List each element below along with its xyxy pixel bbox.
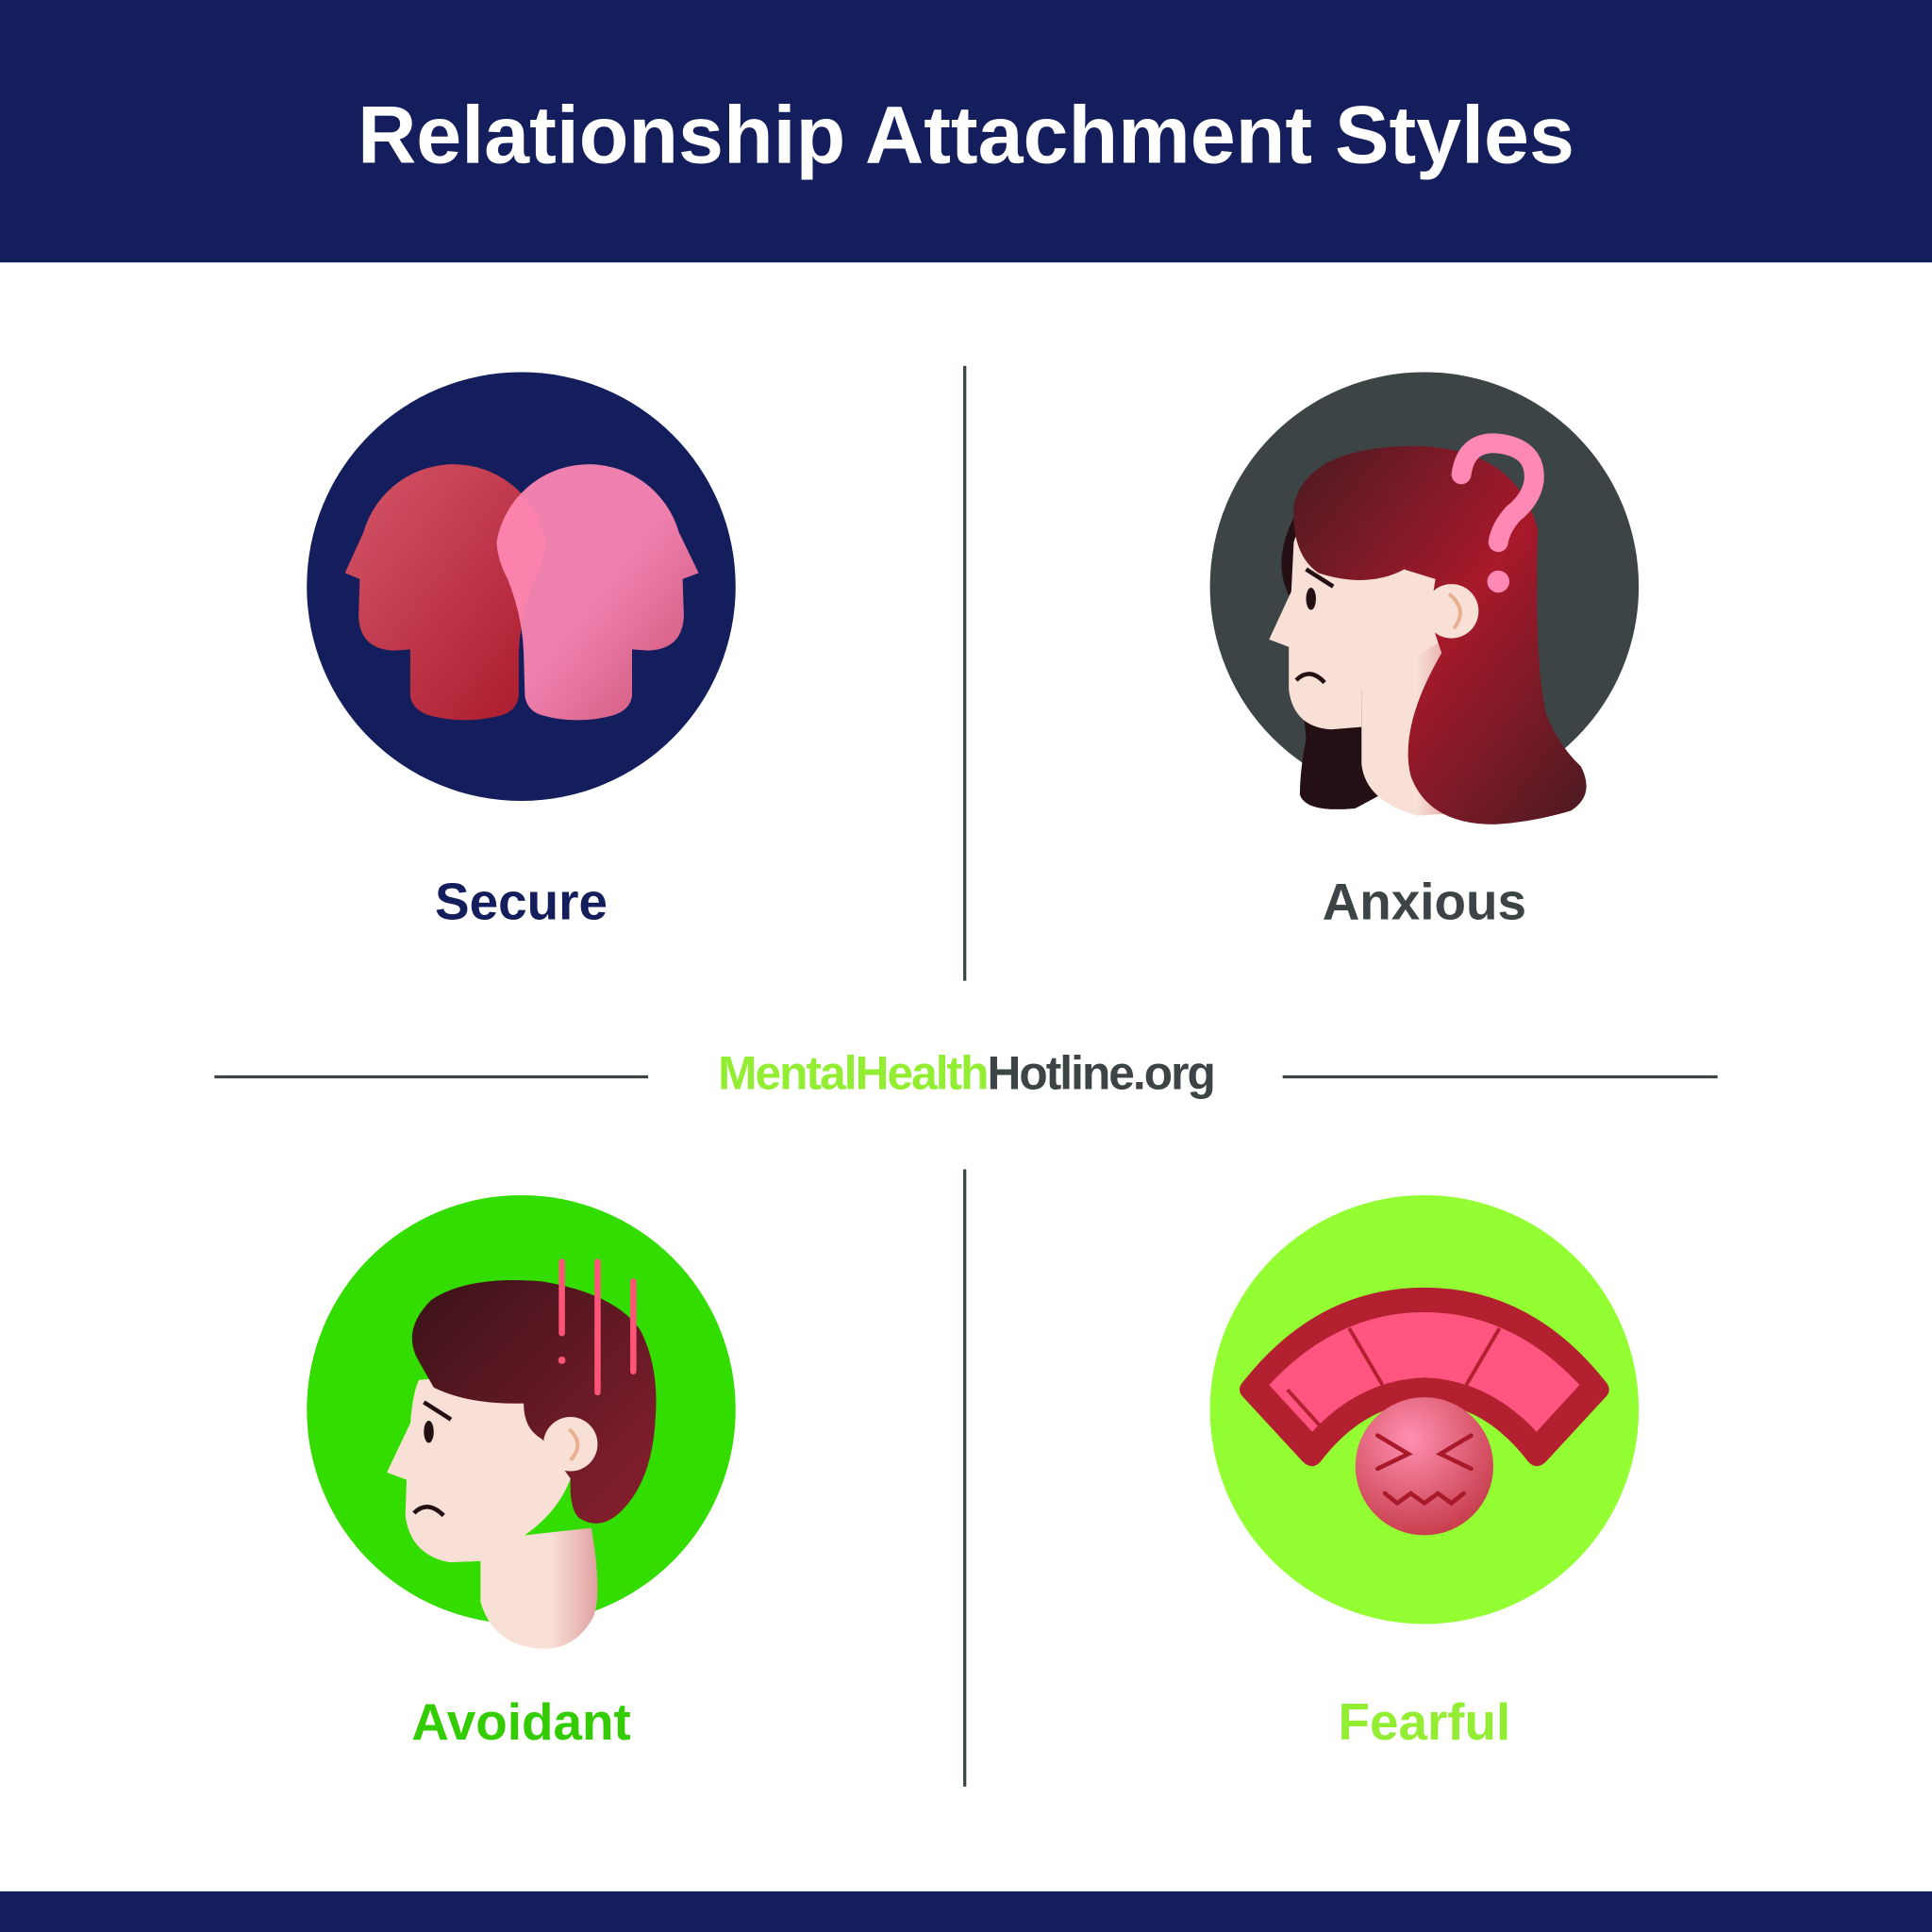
title: Relationship Attachment Styles xyxy=(358,90,1574,180)
panel: anxious xyxy=(1210,372,1639,930)
icon: scared face xyxy=(1356,1397,1493,1535)
panel: secure xyxy=(307,372,736,930)
icon: stress lines xyxy=(562,1261,633,1392)
header bar xyxy=(0,0,1932,262)
label: Avoidant xyxy=(411,1692,631,1751)
panel: avoidant xyxy=(307,1195,736,1751)
label: Anxious xyxy=(1323,872,1526,930)
icon: anxious woman xyxy=(1269,443,1587,824)
footer bar xyxy=(0,1891,1932,1932)
icon: two heads xyxy=(345,464,699,720)
icon: question mark xyxy=(1461,443,1534,542)
label: Secure xyxy=(435,872,608,930)
logo: MentalHealthHotline.org xyxy=(718,1047,1214,1100)
panel: fearful xyxy=(1210,1195,1639,1751)
icon: avoidant man xyxy=(387,1261,657,1649)
label: Fearful xyxy=(1338,1692,1510,1751)
icon: gauge xyxy=(1240,1288,1609,1535)
divider lines xyxy=(214,366,1718,1787)
